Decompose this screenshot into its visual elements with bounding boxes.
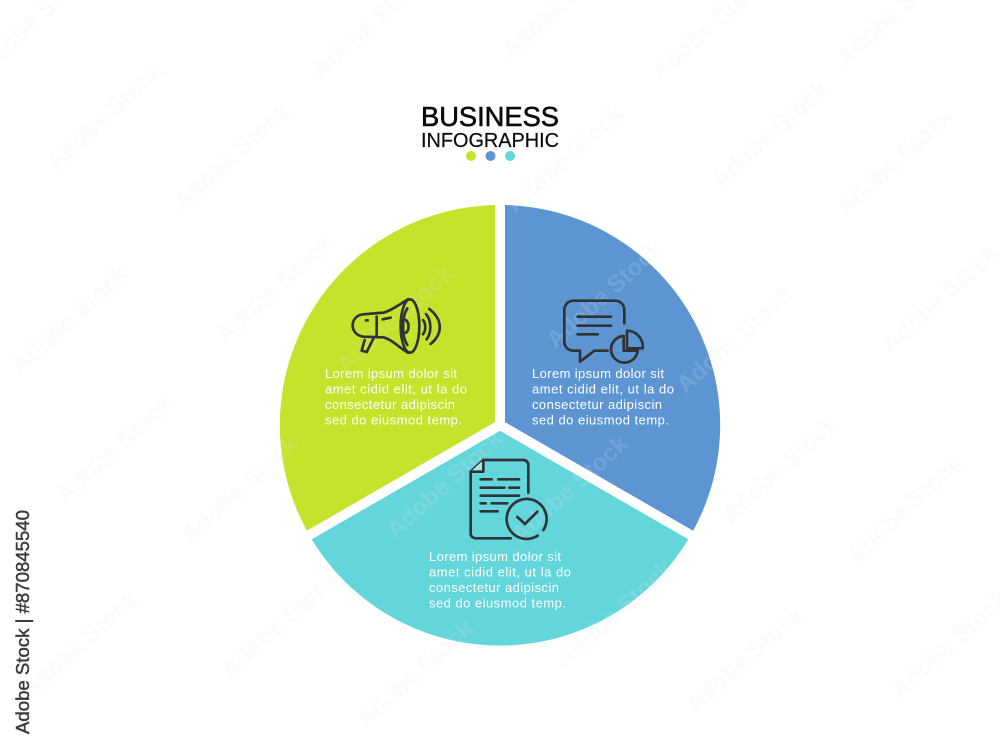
text: blue segment: sed do eiusmod temp. bbox=[532, 412, 669, 428]
text: teal segment: amet cidid elit, ut la do bbox=[429, 564, 571, 580]
icon: document with check mark bbox=[471, 460, 547, 539]
infographic canvas: Adobe Stock bbox=[841, 450, 969, 569]
infographic canvas: Adobe Stock bbox=[6, 260, 134, 379]
infographic canvas: Adobe Stock bbox=[211, 230, 339, 349]
title: INFOGRAPHIC bbox=[421, 130, 559, 152]
text: teal segment: sed do eiusmod temp. bbox=[429, 596, 566, 610]
text: teal segment: Lorem ipsum dolor sit bbox=[429, 549, 561, 564]
text: lime segment: consectetur adipiscin bbox=[325, 397, 455, 412]
stock image credit: Adobe Stock | #870845540 bbox=[12, 510, 33, 734]
title: BUSINESS bbox=[421, 101, 559, 132]
title colour dots bbox=[466, 151, 515, 161]
infographic canvas: Adobe Stock bbox=[506, 430, 634, 549]
text: blue segment bbox=[532, 366, 674, 428]
infographic canvas: Adobe Stock bbox=[501, 100, 629, 219]
text: teal segment bbox=[429, 549, 571, 610]
infographic canvas: Adobe Stock bbox=[671, 280, 799, 399]
text: teal segment: consectetur adipiscin bbox=[429, 580, 559, 595]
text: blue segment: consectetur adipiscin bbox=[532, 397, 662, 412]
infographic canvas: Adobe Stock bbox=[716, 410, 844, 529]
infographic canvas: Adobe Stock bbox=[51, 390, 179, 509]
infographic canvas: Adobe Stock bbox=[541, 235, 669, 354]
infographic canvas: Adobe Stock bbox=[216, 565, 344, 684]
icon: chat bubble with pie chart bbox=[564, 301, 643, 363]
infographic canvas: Adobe Stock bbox=[381, 425, 509, 544]
infographic canvas: Adobe Stock bbox=[331, 260, 459, 379]
text: blue segment: Lorem ipsum dolor sit bbox=[532, 366, 664, 381]
text: lime segment: Lorem ipsum dolor sit bbox=[325, 366, 457, 381]
text: blue segment: amet cidid elit, ut la do bbox=[532, 382, 674, 396]
text: lime segment bbox=[325, 366, 467, 428]
infographic canvas: Adobe Stock bbox=[681, 600, 809, 719]
infographic canvas: Adobe Stock bbox=[706, 75, 834, 194]
infographic canvas: Adobe Stock bbox=[168, 97, 296, 216]
pie segment: lime bbox=[280, 205, 495, 531]
infographic canvas: Adobe Stock bbox=[41, 57, 169, 176]
infographic canvas: Adobe Stock bbox=[351, 615, 479, 734]
text: lime segment: amet cidid elit, ut la do bbox=[325, 382, 467, 396]
infographic canvas: Adobe Stock bbox=[16, 585, 144, 704]
icon: megaphone bbox=[353, 299, 440, 353]
text: lime segment: sed do eiusmod temp. bbox=[325, 412, 462, 428]
infographic canvas: Adobe Stock bbox=[831, 103, 959, 222]
infographic canvas: Adobe Stock bbox=[876, 240, 1000, 359]
title bbox=[421, 101, 559, 152]
infographic canvas: Adobe Stock bbox=[551, 555, 679, 674]
pie segment: teal bbox=[312, 431, 688, 646]
pie segment: blue bbox=[505, 205, 720, 531]
infographic canvas: Adobe Stock bbox=[176, 430, 304, 549]
